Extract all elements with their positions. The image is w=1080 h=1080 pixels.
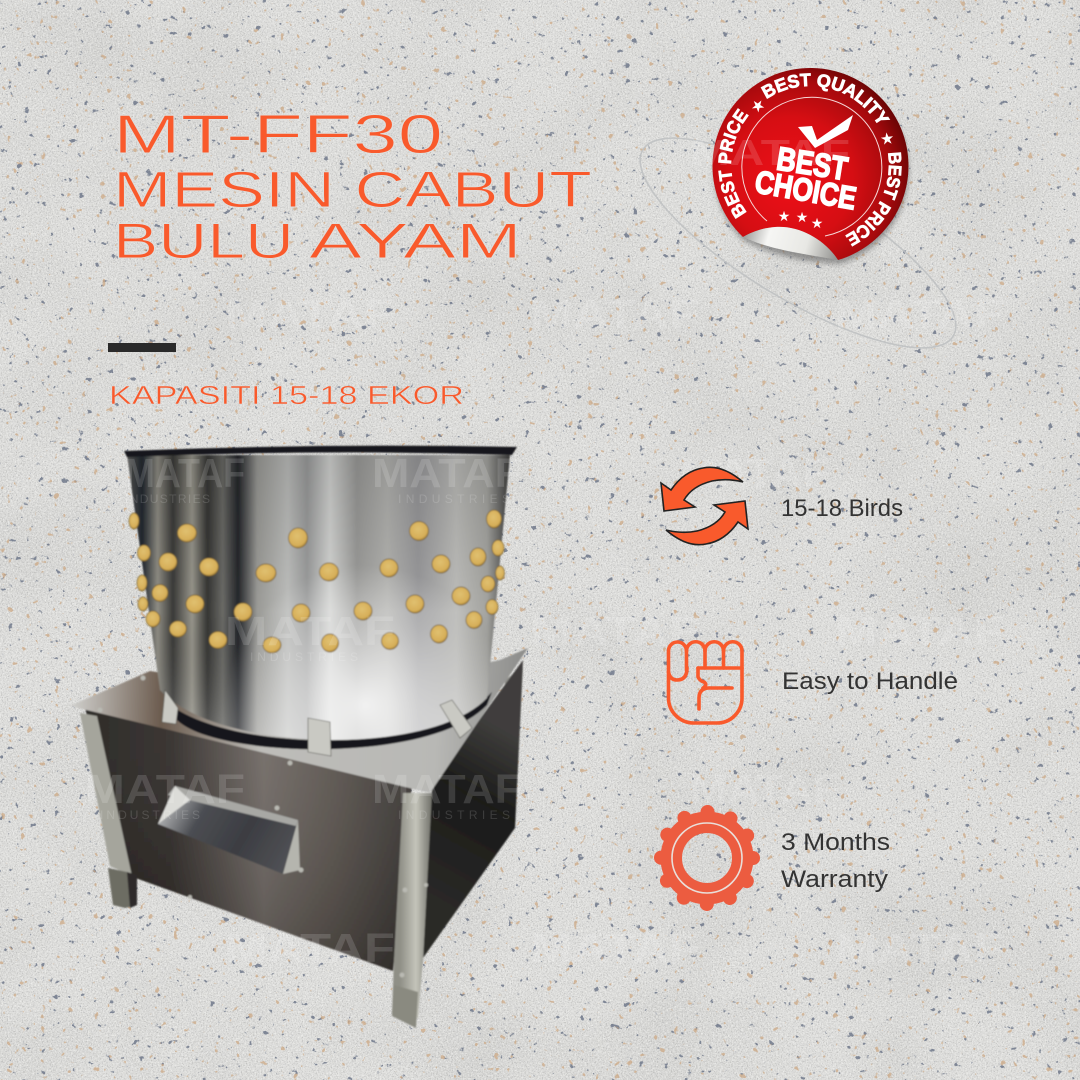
icon: fist	[668, 642, 742, 723]
badge stars: ★	[746, 94, 769, 118]
title: MT-FF30	[113, 103, 443, 165]
watermark tiles: MATAF	[835, 608, 1005, 654]
machine side panel	[423, 660, 523, 958]
icon: check mark	[798, 115, 853, 148]
badge stars: ★	[778, 209, 790, 225]
badge headline	[752, 140, 859, 217]
watermark tiles: MATAF	[125, 450, 245, 496]
watermark tiles: INDUSTRIES	[250, 650, 358, 664]
divider bar	[108, 343, 176, 352]
subtitle: capacity: KAPASITI 15-18 EKOR	[109, 380, 464, 410]
label: warranty: 3 Months	[781, 829, 890, 856]
badge curved text: BEST PRICE	[845, 152, 902, 247]
badge stars: ★	[811, 216, 823, 232]
watermark tiles: MATAF	[85, 766, 245, 812]
drum black band	[165, 692, 492, 749]
badge inner ring	[742, 97, 882, 236]
watermark tiles: MATAF	[530, 925, 700, 971]
front leg	[392, 793, 432, 1028]
watermark tiles: MATAF	[225, 608, 395, 654]
watermark tiles: MATAF	[372, 450, 522, 496]
badge stars	[746, 94, 899, 232]
watermark tiles: MATAF	[690, 766, 840, 812]
watermark tiles: INDUSTRIES	[398, 492, 510, 506]
stainless drum	[127, 455, 510, 740]
watermark tiles: INDUSTRIES	[100, 808, 200, 822]
badge stars: ★	[796, 210, 808, 226]
watermark tiles: MATAF	[530, 608, 700, 654]
chute	[158, 786, 300, 874]
product photo: chicken plucker machine	[70, 446, 528, 1028]
drum brackets	[162, 690, 472, 756]
feature 2: handling	[668, 642, 958, 723]
icon: rotating arrows	[661, 467, 748, 545]
watermark tiles: MATAF	[225, 291, 395, 337]
left leg	[80, 713, 137, 908]
machine front panel	[85, 708, 412, 971]
title: AYAM	[309, 213, 522, 269]
badge headline: CHOICE	[752, 163, 859, 217]
title	[113, 103, 592, 269]
back right leg	[500, 667, 523, 828]
top plate	[70, 648, 528, 793]
label: warranty: Warranty	[781, 866, 888, 893]
watermark tiles: MATAF	[690, 132, 850, 173]
watermark tiles: MATAF	[835, 925, 1005, 971]
badge curved text	[718, 73, 902, 247]
badge peeled corner	[743, 227, 838, 260]
badge curved text: BEST PRICE	[718, 108, 749, 219]
watermark tiles: MATAF	[225, 925, 395, 971]
watermark tiles: INDUSTRIES	[398, 808, 510, 822]
label: warranty	[781, 829, 890, 893]
drum top rim	[124, 446, 517, 457]
drum rubber fingers	[129, 510, 504, 653]
title: BULU	[113, 213, 294, 269]
watermark tiles	[85, 132, 1005, 971]
title: MESIN CABUT	[113, 161, 592, 218]
watermark tiles: MATAF	[835, 291, 1005, 337]
watermark tiles: MATAF	[372, 766, 522, 812]
ellipse outline behind badge	[614, 102, 982, 384]
watermark tiles: INDUSTRIES	[125, 492, 210, 506]
feature 1: capacity	[661, 467, 903, 545]
best choice badge	[711, 68, 912, 267]
machine rivets	[98, 676, 428, 978]
label: 15-18 birds: 15-18 Birds	[781, 495, 903, 522]
badge stars: ★	[876, 128, 899, 149]
watermark tiles: MATAF	[530, 291, 700, 337]
badge disc	[712, 68, 908, 260]
badge headline: BEST	[774, 140, 850, 187]
label: easy to handle: Easy to Handle	[782, 668, 958, 695]
badge curved text: BEST QUALITY	[760, 73, 890, 124]
feature 3: warranty	[661, 812, 890, 904]
watermark tiles: MATAF	[680, 450, 830, 496]
icon: gear	[661, 812, 753, 904]
